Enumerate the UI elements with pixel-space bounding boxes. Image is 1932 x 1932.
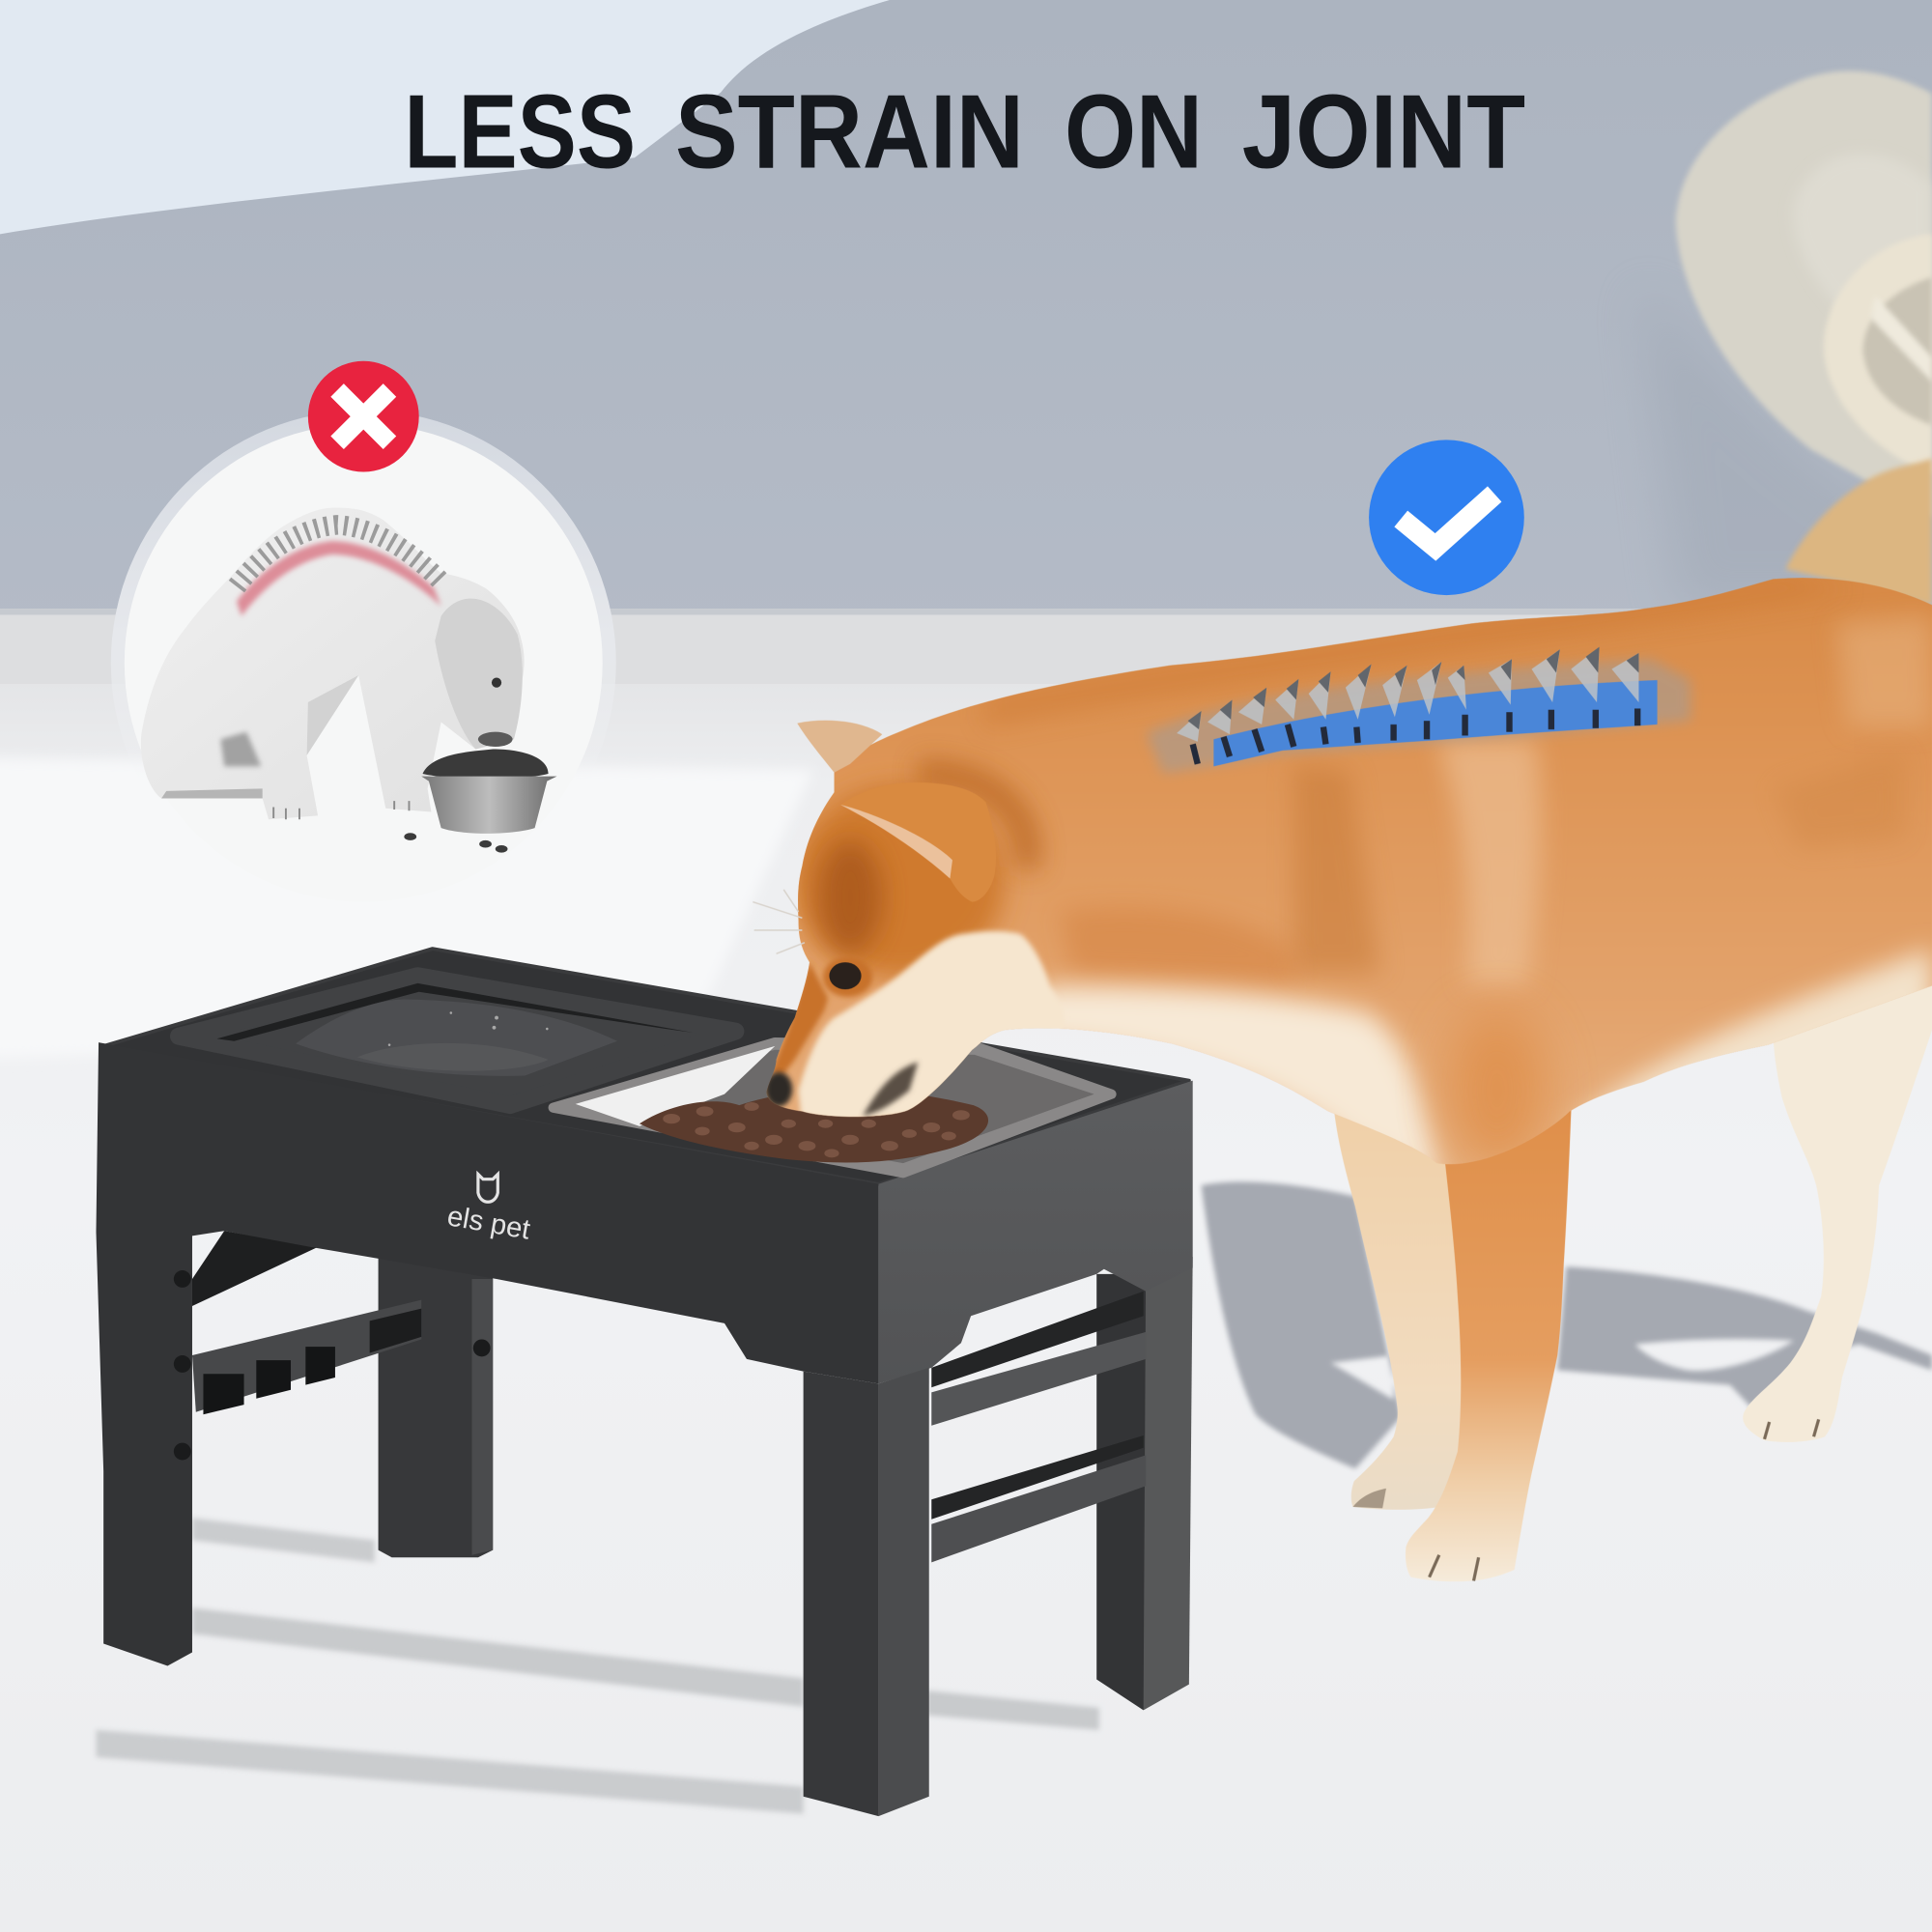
hind leg	[1743, 961, 1932, 1442]
right side rails	[931, 1292, 1146, 1562]
kibble	[639, 1090, 988, 1162]
dog shadow on floor	[1202, 1181, 1401, 1468]
mouth	[863, 1062, 918, 1117]
paws	[273, 801, 409, 819]
elevated feeder stand	[96, 949, 1193, 1816]
icon: red cross	[308, 361, 419, 472]
spine vertebrae	[237, 525, 441, 586]
chest cream	[1010, 985, 1441, 1182]
haunch shadow	[220, 732, 261, 766]
spilled kibble	[404, 833, 508, 853]
top of back darker	[985, 573, 1848, 727]
background wall	[0, 0, 1932, 640]
body and head	[767, 578, 1932, 1165]
adjustment knobs	[174, 1270, 491, 1460]
nose	[765, 1072, 792, 1106]
title: JOINT	[1242, 72, 1525, 189]
belly cream	[1569, 938, 1932, 1112]
inset circle	[111, 411, 616, 916]
spine dark discs	[1193, 708, 1637, 764]
near ear	[840, 782, 996, 902]
spine blue band	[1213, 680, 1658, 766]
logo: els pet: els pet	[445, 1200, 532, 1246]
title: STRAIN	[675, 72, 1024, 189]
steel bowl	[421, 777, 557, 834]
muzzle orange	[771, 962, 828, 1076]
body fur shading	[1293, 764, 1380, 974]
white dog hunched	[141, 508, 525, 819]
near front leg	[1406, 1084, 1573, 1581]
spine: healthy blue	[1146, 647, 1690, 774]
right steel bowl	[554, 1042, 1112, 1173]
icon: blue check	[1369, 440, 1524, 595]
background ornament: cream chair	[1676, 71, 1932, 518]
shoulder orange	[1448, 1010, 1547, 1171]
front face and front legs	[96, 1042, 878, 1665]
window shadow stripes on floor	[96, 1518, 1099, 1814]
right side face	[878, 1081, 1193, 1383]
back leg	[379, 1244, 493, 1557]
baseboard and floor	[0, 609, 1932, 1932]
far foreleg shade	[307, 675, 358, 755]
spine spike tips	[1188, 647, 1638, 729]
title: LESS	[404, 72, 636, 189]
logo: els pet	[445, 1175, 532, 1246]
center leg	[804, 1368, 929, 1816]
inset: incorrect posture	[111, 411, 616, 916]
eye	[829, 962, 862, 989]
tail	[1785, 458, 1932, 605]
eye patch orange	[823, 957, 872, 997]
left bowl lid	[179, 976, 735, 1105]
cheek cream	[799, 931, 1065, 1122]
spine glow	[1146, 659, 1690, 774]
spine red	[237, 541, 441, 616]
head orange	[795, 784, 1005, 977]
right back leg	[1096, 1257, 1193, 1710]
dog: correct posture	[739, 458, 1932, 1581]
far front leg	[1333, 1103, 1472, 1510]
dark forehead patch	[818, 840, 882, 953]
title: ON	[1065, 72, 1203, 189]
left lower rail	[192, 1300, 421, 1414]
back ear	[797, 721, 882, 773]
title	[404, 72, 1525, 189]
ear shadow arc	[918, 774, 1027, 868]
head	[435, 599, 523, 750]
top surface	[103, 949, 1189, 1184]
spine spikes	[1177, 647, 1638, 742]
left upper back rail	[192, 1231, 318, 1306]
kibble heap	[423, 750, 549, 780]
whiskers	[753, 890, 805, 953]
